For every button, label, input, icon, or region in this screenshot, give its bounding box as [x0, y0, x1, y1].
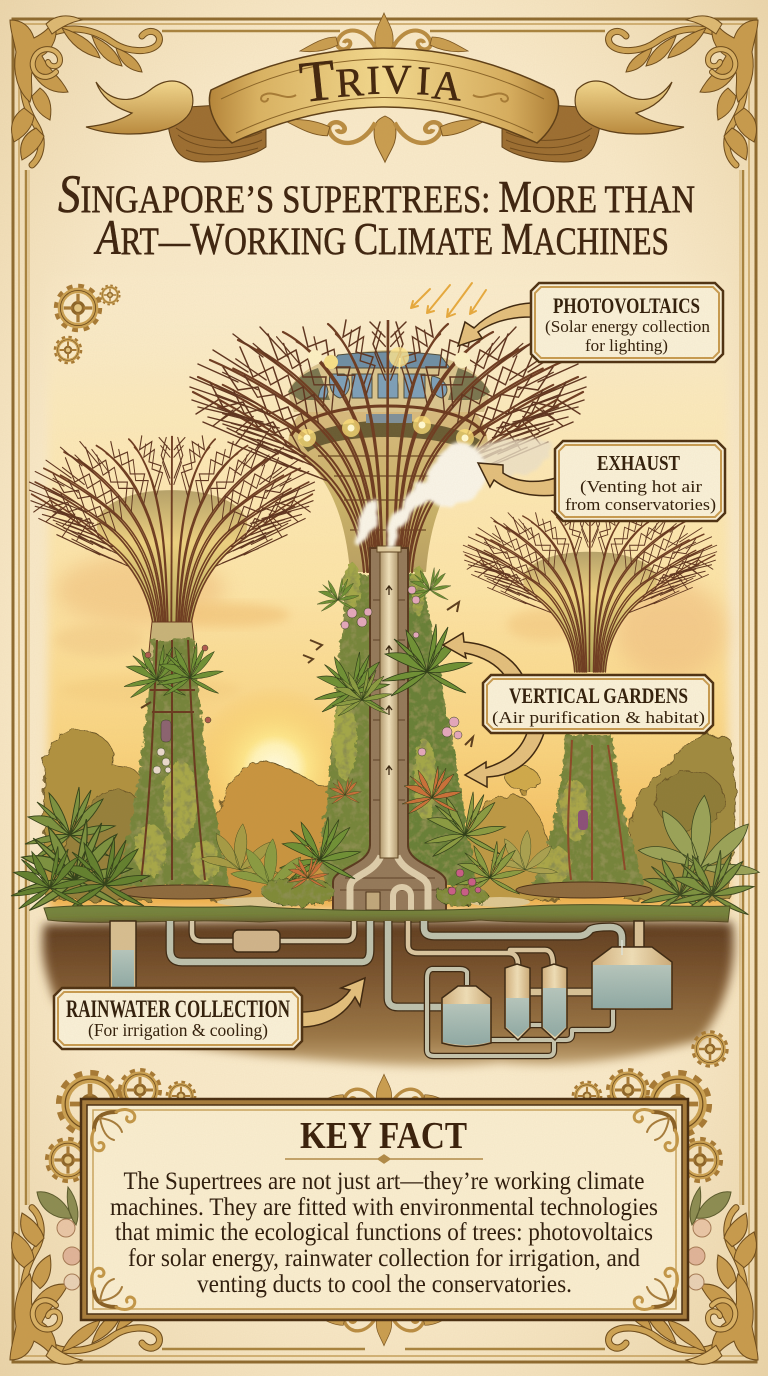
top fleur: [313, 1074, 455, 1110]
sun rays: [411, 283, 486, 317]
brick column and base housing: [333, 548, 446, 912]
filter column 2: [542, 964, 567, 1040]
left tank: [442, 986, 491, 1046]
key fact panel: [81, 1099, 688, 1320]
right tree crown: [463, 508, 717, 672]
large tank: [592, 921, 672, 1009]
central moss highlights: [333, 563, 436, 820]
right tree trunk: [533, 735, 645, 885]
callout: exhaust: (Venting hot air: [580, 477, 702, 496]
solar dome: [288, 350, 490, 452]
right supertree: [463, 508, 717, 885]
corner scrolls: [634, 1110, 677, 1151]
banner: [86, 13, 684, 162]
banner title: T: [297, 47, 339, 115]
blue-grey circuit left: [170, 921, 370, 962]
central crown branches: [190, 320, 586, 572]
small birds: [141, 602, 473, 747]
left botanicals: [37, 1187, 81, 1290]
key fact body: for solar energy, rainwater collection for irrigation, and: [128, 1243, 640, 1272]
main title: [58, 164, 695, 265]
label text: VERTICAL GARDENS: [509, 683, 688, 708]
rim ring: [291, 406, 485, 436]
heading divider: [285, 1155, 483, 1163]
left gears: [48, 1071, 194, 1180]
background forest: [44, 729, 735, 900]
left tree leaves and flowers: [124, 643, 223, 774]
arrow to upper garden: [443, 633, 523, 676]
main plume: [384, 443, 489, 545]
banner title: I: [366, 57, 381, 103]
callout: vertical gardens: (Air purification & habitat): [492, 708, 705, 727]
callout: exhaust: [478, 441, 725, 521]
box: [483, 675, 713, 733]
central trunk moss: [318, 575, 478, 900]
label text: PHOTOVOLTAICS: [553, 293, 700, 318]
banner title: A: [430, 61, 464, 110]
banner right tail: [502, 81, 684, 162]
left tree ribs: [141, 640, 205, 882]
central foliage: [231, 568, 525, 906]
arrow to exhaust: [478, 463, 556, 496]
frame: [81, 1099, 688, 1320]
left tube: [110, 921, 136, 988]
right tree ribs: [568, 740, 625, 880]
pipe network: [110, 921, 622, 1056]
key fact body: The Supertrees are not just art—they’re working climate: [124, 1166, 644, 1195]
banner arch: [209, 48, 559, 143]
callout: rainwater collection: (For irrigation & cooling): [88, 1020, 268, 1041]
key fact body: machines. They are fitted with environmental technologies: [110, 1192, 658, 1221]
funnel bands: [318, 456, 458, 530]
right gears: [574, 1071, 720, 1180]
left tree crown: [29, 436, 315, 640]
underground soil: [42, 921, 734, 1066]
corner ornament: top left: [10, 16, 159, 165]
planters: [119, 882, 652, 907]
top fleur ornament: [300, 13, 468, 55]
pipe from tree to left tank: [388, 921, 441, 1007]
corner ornament: bottom right: [609, 1208, 758, 1364]
main title: SINGAPORE’S SUPERTREES: MORE THAN: [58, 164, 695, 224]
left supertree: [29, 436, 315, 886]
key fact body: [110, 1166, 658, 1298]
illustration: sunset sky: [48, 270, 728, 910]
right tree flower: [578, 810, 588, 830]
left plume: [355, 497, 379, 548]
banner inner line: [221, 59, 544, 133]
main title: ART—WORKING CLIMATE MACHINES: [94, 209, 669, 265]
exhaust smoke plumes: [355, 439, 552, 548]
banner left tail: [86, 81, 266, 162]
right tree moss highlights: [538, 780, 589, 883]
box: [531, 283, 723, 362]
left tree moss highlights: [134, 760, 219, 880]
corner scrolls: [92, 1110, 135, 1151]
key fact heading: KEY FACT: [300, 1115, 467, 1157]
corner ornament: bottom left: [10, 1208, 159, 1364]
banner flourishes: [261, 93, 508, 102]
callout: vertical gardens: [443, 633, 713, 787]
callout: exhaust: from conservatories): [565, 495, 716, 514]
banner title: R: [334, 58, 366, 106]
right botanicals: [687, 1187, 731, 1290]
label text: EXHAUST: [597, 451, 680, 475]
arrow to lower garden: [465, 733, 544, 787]
key fact body: venting ducts to cool the conservatories.: [197, 1269, 572, 1298]
key fact decorations: [37, 1071, 731, 1346]
callout: photovoltaics: [458, 283, 723, 362]
box: [54, 988, 302, 1049]
lower return pipes: [427, 969, 613, 1056]
callout: photovoltaics: (Solar energy collection: [545, 317, 710, 336]
lower fleur ornament: [284, 116, 486, 162]
foreground plants right: [491, 795, 759, 917]
corner scrolls: [634, 1268, 677, 1309]
inline cylinder: [233, 930, 280, 952]
corner ornament: top right: [609, 16, 758, 165]
banner title: I: [416, 57, 432, 104]
small gear lower right: [694, 1033, 726, 1065]
arrow to solar canopy: [458, 303, 531, 346]
central funnel: [288, 402, 488, 572]
filter column 1: [505, 964, 530, 1040]
left tree trunk: [118, 640, 230, 886]
faint cloud: [470, 439, 552, 478]
banner title: V: [382, 56, 412, 102]
foreground plants left: [11, 787, 278, 910]
label text: RAINWATER COLLECTION: [66, 996, 290, 1023]
central air duct with arrows: [377, 546, 401, 858]
left tree neck cage: [148, 622, 196, 665]
callout: rainwater collection: [54, 978, 365, 1049]
decorative gears top left: [56, 286, 119, 362]
callout: photovoltaics: for lighting): [585, 336, 668, 355]
bottom fleur: [313, 1310, 455, 1346]
corner scrolls: [92, 1268, 135, 1309]
ground strip: [44, 905, 730, 922]
central supertree: [190, 320, 586, 912]
glowing lights: [298, 347, 474, 447]
arrow to pipes: [301, 978, 365, 1027]
water tanks: [442, 921, 672, 1046]
pipe to filters: [408, 921, 553, 965]
pipe to large tank: [424, 921, 622, 946]
box: [555, 441, 725, 521]
key fact body: that mimic the ecological functions of trees: photovoltaics: [115, 1217, 653, 1246]
